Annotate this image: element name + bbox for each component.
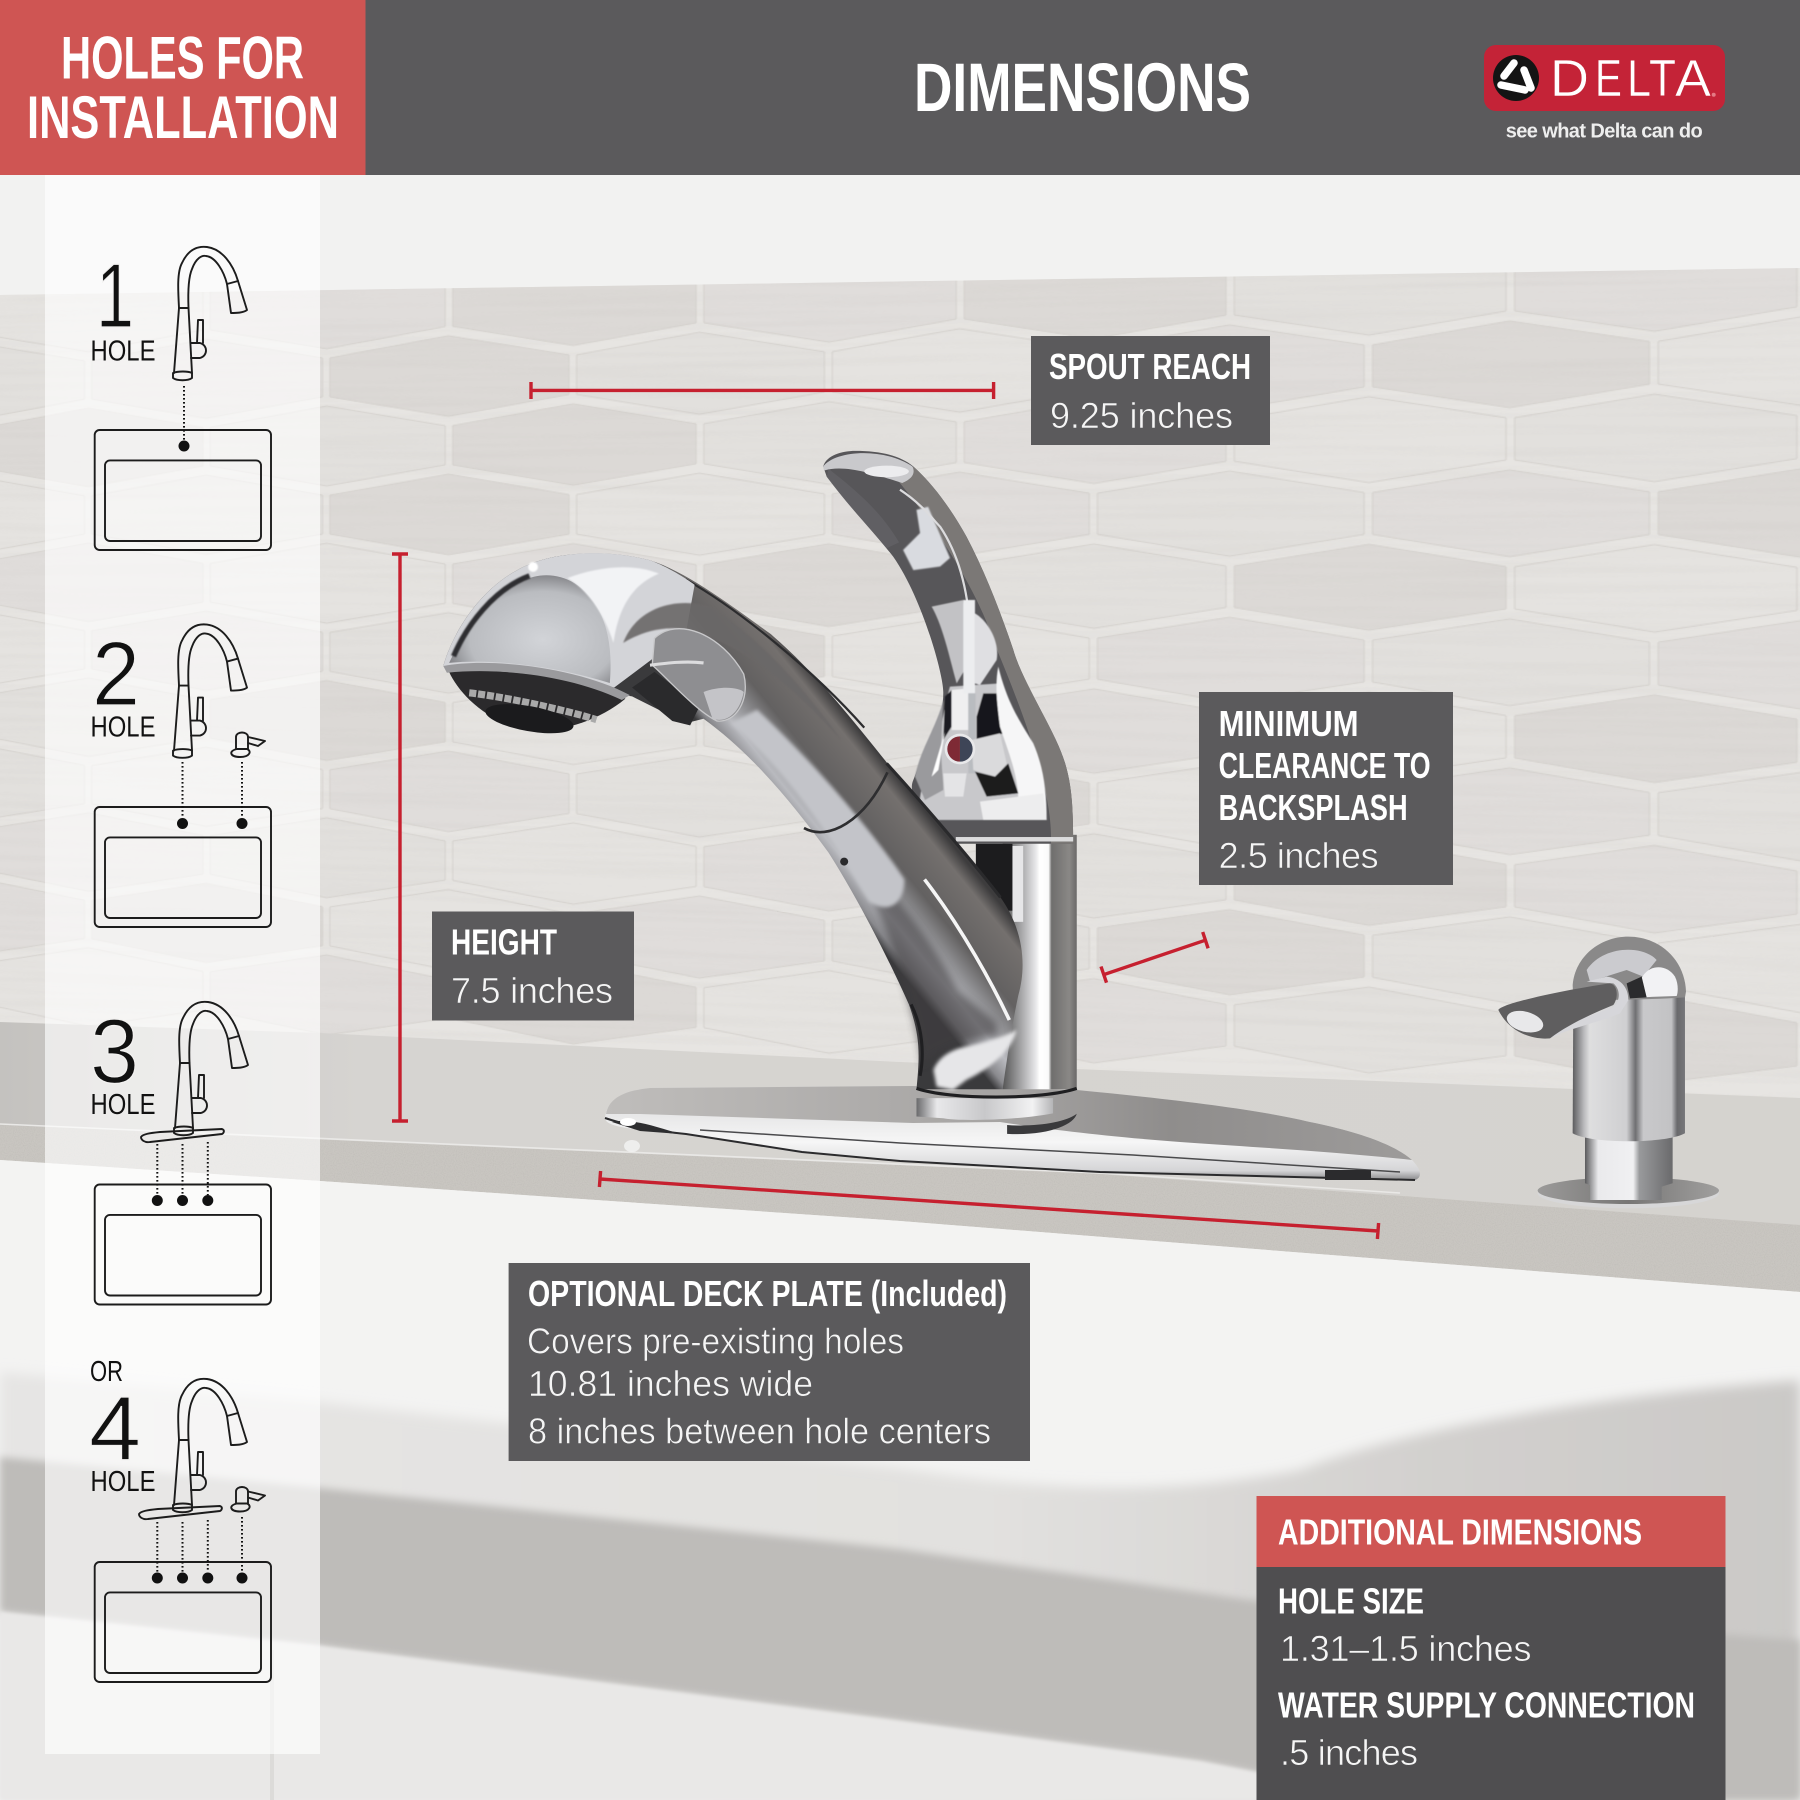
callout: optional deck plate: OPTIONAL DECK PLATE (Included): [528, 1273, 1007, 1314]
measure: deck plate width: [599, 1171, 1379, 1239]
callout: height: 7.5 inches: [451, 970, 613, 1011]
lever top opening: [823, 453, 914, 483]
icon: soap dispenser: [231, 732, 265, 757]
measure: backsplash clearance: [1101, 932, 1208, 983]
label or: OR: [90, 1356, 123, 1388]
soap dispenser: [1498, 937, 1719, 1208]
icon: faucet: [174, 1002, 248, 1135]
panel: holes for installation: [45, 175, 320, 1754]
dispenser neck: [1585, 1137, 1673, 1200]
plate body: [605, 1086, 1420, 1180]
dispenser dome: [1573, 937, 1686, 1000]
icon: delta triangle mark: [1493, 55, 1539, 101]
callout: spout reach: [1031, 336, 1270, 445]
label hole: HOLE: [90, 336, 156, 368]
background: blurred foreground sink rim: [0, 1372, 1800, 1800]
panel body: [1256, 1567, 1726, 1800]
measure: spout reach: [531, 382, 994, 399]
numeral 1: 1: [96, 246, 134, 347]
wordmark: D: [1550, 50, 1589, 108]
faucet column: [976, 835, 1077, 1089]
option: 3 holes: [90, 1002, 271, 1304]
spray head underlay: [443, 553, 695, 687]
wordmark: L: [1627, 50, 1651, 108]
wordmark: E: [1595, 50, 1622, 108]
spray face: [449, 671, 625, 731]
panel heading: ADDITIONAL DIMENSIONS: [1278, 1512, 1642, 1553]
background: countertop and cabinet: [0, 1022, 1800, 1800]
callout: minimum clearance: CLEARANCE TO: [1219, 745, 1431, 786]
water supply connection: .5 inches: [1280, 1732, 1418, 1773]
spout and spray head: [443, 553, 1023, 1090]
icon: deck plate: [139, 1506, 222, 1519]
icon: sink with one hole: [95, 386, 271, 550]
icon: faucet: [173, 247, 247, 380]
callout: minimum clearance: BACKSPLASH: [1219, 787, 1408, 828]
wordmark: T: [1649, 50, 1676, 108]
option: 4 holes: [89, 1356, 271, 1682]
dispenser body: [1573, 997, 1685, 1141]
wordmark: [1550, 50, 1711, 108]
option: 2 holes: [90, 624, 271, 927]
weep hole: [840, 858, 848, 866]
callout: spout reach: 9.25 inches: [1050, 395, 1233, 436]
callout: optional deck plate: 10.81 inches wide: [528, 1363, 813, 1404]
icon: soap dispenser: [231, 1487, 265, 1512]
option: 1 hole: [90, 246, 271, 550]
callout: optional deck plate: [509, 1263, 1030, 1461]
faucet photo: [443, 451, 1077, 1134]
spray button: [632, 672, 700, 725]
deck plate: [605, 1086, 1420, 1180]
label hole: HOLE: [90, 712, 156, 744]
callout: height: HEIGHT: [451, 922, 557, 962]
lever outer band: [896, 467, 1073, 844]
dispenser flange: [1538, 1177, 1719, 1208]
icon: sink with three holes: [95, 1142, 271, 1304]
spout seam: [804, 772, 887, 832]
title: DIMENSIONS: [914, 49, 1251, 126]
logo: delta: [1484, 45, 1725, 142]
logo: delta: see what Delta can do: [1506, 120, 1703, 142]
spray head dome: [449, 575, 611, 683]
numeral 4: 4: [89, 1379, 141, 1480]
callout: spout reach: SPOUT REACH: [1049, 346, 1251, 387]
measure: height: [392, 554, 408, 1121]
icon: deck plate: [141, 1129, 224, 1142]
label hole: HOLE: [90, 1089, 156, 1121]
header block: holes for installation: HOLES FOR: [61, 25, 304, 92]
dispenser lever: [1498, 977, 1628, 1039]
panel heading: [1256, 1496, 1726, 1567]
lever handle and hub: [823, 451, 1073, 844]
callout: minimum clearance: 2.5 inches: [1219, 835, 1379, 876]
lever highlight: [903, 507, 950, 570]
water supply connection: [1278, 1684, 1695, 1773]
water supply connection: WATER SUPPLY CONNECTION: [1278, 1684, 1695, 1726]
icon: sink with two holes: [95, 762, 271, 927]
callout: minimum clearance: [1199, 692, 1453, 885]
label hole: HOLE: [90, 1466, 156, 1498]
hot and cold indicator: [945, 734, 975, 764]
callout: minimum clearance: MINIMUM: [1219, 703, 1359, 744]
spout lower shading: [871, 879, 998, 1067]
spout base reflection: [933, 1030, 1016, 1090]
wordmark: A: [1675, 50, 1711, 108]
panel: additional dimensions: [1256, 1496, 1726, 1800]
numeral 2: 2: [92, 624, 140, 725]
hole size: HOLE SIZE: [1278, 1580, 1424, 1622]
numeral 3: 3: [90, 1002, 139, 1102]
callout: optional deck plate: Covers pre-existing holes: [527, 1320, 904, 1362]
header block: holes for installation: [0, 0, 366, 175]
icon: faucet: [173, 1379, 247, 1512]
hole size: 1.31–1.5 inches: [1280, 1628, 1532, 1669]
callout: height: [432, 912, 634, 1020]
callout: optional deck plate: 8 inches between hole centers: [528, 1411, 991, 1452]
hub chrome reflections: [915, 600, 1047, 820]
icon: sink with four holes: [95, 1517, 271, 1682]
hole size: [1278, 1580, 1532, 1669]
header bar: [0, 0, 1800, 175]
base collar: [916, 1088, 1077, 1134]
background: tiled backsplash: [0, 268, 1800, 1098]
plate top surface: [606, 1086, 1412, 1160]
icon: faucet: [173, 624, 247, 758]
header block: holes for installation: INSTALLATION: [27, 84, 339, 151]
